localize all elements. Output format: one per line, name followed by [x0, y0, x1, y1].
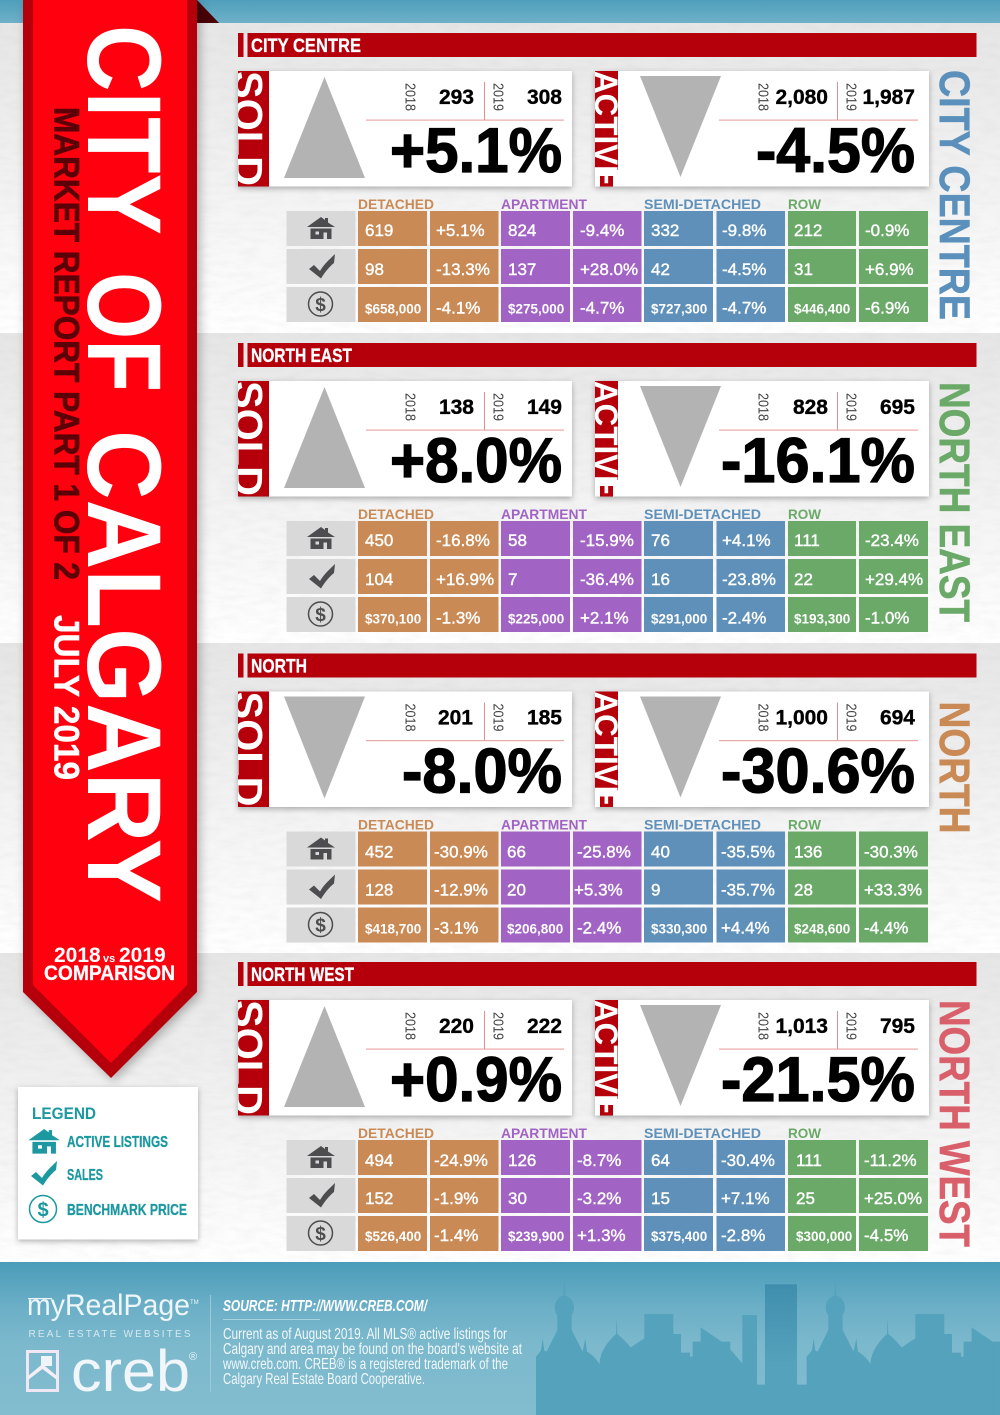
- sold and active cards: 2019: [490, 1012, 506, 1040]
- table: City Centre by property type: -4.5%: [722, 260, 766, 279]
- table: North by property type: 128: [365, 880, 393, 900]
- table: North by property type: -35.5%: [721, 842, 775, 862]
- sold and active cards: 2019: [490, 704, 506, 732]
- heading: City Centre: CITY CENTRE: [251, 36, 361, 57]
- table: North East by property type: +29.4%: [865, 570, 923, 589]
- sold and active cards: 2018: [754, 704, 772, 732]
- side label: North West: NORTH WEST: [930, 1000, 978, 1247]
- sold and active cards: 694: [880, 706, 915, 730]
- side label: North East: NORTH EAST: [930, 382, 978, 622]
- comparison caption: [44, 944, 175, 985]
- table: North by property type: [286, 816, 928, 942]
- sold and active cards: 2019: [842, 393, 860, 421]
- heading: North West: [238, 962, 976, 986]
- table: North East by property type: 7: [508, 570, 517, 589]
- table: City Centre by property type: -9.8%: [722, 221, 766, 240]
- sold and active cards: 2019: [842, 83, 860, 111]
- sold and active cards: 2018: [402, 393, 418, 421]
- table: North West by property type: -4.5%: [864, 1226, 908, 1245]
- table: North by property type: $418,700: [365, 922, 421, 936]
- sold and active cards: -21.5%: [721, 1045, 915, 1115]
- table: City Centre by property type: -0.9%: [865, 221, 909, 240]
- sold and active cards: 2018: [754, 83, 772, 111]
- sold label: SOLD: [225, 692, 271, 806]
- table: North West by property type: 30: [508, 1189, 527, 1208]
- table: North East by property type: -36.4%: [580, 570, 634, 589]
- sold and active cards: -4.5%: [756, 116, 915, 186]
- sold and active cards: 1,000: [775, 706, 828, 730]
- logo: myRealPage: myRealPage: [27, 1289, 190, 1322]
- sold and active cards: [225, 71, 929, 186]
- table: City Centre by property type: -6.9%: [865, 298, 909, 318]
- table: North East by property type: $225,000: [508, 612, 564, 626]
- legend: ACTIVE LISTINGS: [67, 1134, 168, 1151]
- table: North West by property type: 64: [651, 1151, 670, 1170]
- table: North West by property type: $526,400: [365, 1229, 421, 1244]
- table: North East by property type: 450: [365, 531, 393, 550]
- table: North East by property type: $370,100: [365, 612, 421, 626]
- main title: CITY: [65, 25, 182, 235]
- table: North East by property type: -23.4%: [865, 531, 919, 550]
- main title: [65, 25, 182, 903]
- icon: active listings house: [28, 1129, 60, 1154]
- sold and active cards: 2019: [490, 83, 506, 111]
- table: North by property type: -12.9%: [434, 880, 488, 900]
- logo: creb: ®: [189, 1351, 197, 1363]
- icon: benchmark price: [30, 1196, 56, 1222]
- table: North West by property type: -11.2%: [864, 1151, 917, 1170]
- sold and active cards: 149: [527, 396, 562, 419]
- table: City Centre by property type: 332: [651, 221, 679, 240]
- table: City Centre by property type: +28.0%: [580, 260, 638, 279]
- icon: sold down triangle: [284, 696, 365, 798]
- section: North East: [225, 343, 978, 632]
- table: North East by property type: 104: [365, 570, 393, 589]
- legend: SALES: [67, 1167, 103, 1184]
- disclaimer text: [222, 1326, 522, 1388]
- table: North West by property type: [286, 1125, 928, 1251]
- sold and active cards: 2018: [402, 704, 418, 732]
- comparison caption: vs: [103, 953, 115, 965]
- table: North East by property type: 111: [794, 531, 820, 550]
- sold and active cards: 2018: [402, 83, 418, 111]
- logo: myRealPage: REAL ESTATE WEBSITES: [28, 1329, 191, 1340]
- table: North East by property type: +2.1%: [580, 608, 629, 628]
- icon: active down triangle: [640, 1005, 721, 1106]
- sold and active cards: -16.1%: [721, 426, 915, 496]
- heading: North West: NORTH WEST: [251, 965, 354, 986]
- table: North by property type: $330,300: [651, 922, 707, 936]
- table: City Centre by property type: $446,400: [794, 302, 850, 316]
- table: City Centre by property type: 212: [794, 221, 822, 240]
- icon: benchmark price: $: [37, 1200, 49, 1222]
- table: North East by property type: 58: [508, 531, 527, 550]
- icon: sold up triangle: [284, 77, 365, 178]
- sold and active cards: 222: [527, 1015, 562, 1038]
- main title: CALGARY: [65, 430, 182, 903]
- sold and active cards: 2019: [842, 1012, 860, 1040]
- sold label: SOLD: [225, 381, 271, 496]
- table: North West by property type: $300,000: [796, 1229, 852, 1244]
- main title: OF: [65, 272, 182, 392]
- table: City Centre by property type: +5.1%: [436, 221, 485, 240]
- sold and active cards: 828: [793, 396, 828, 419]
- heading: North: [238, 654, 976, 678]
- table: North West by property type: -1.4%: [434, 1226, 478, 1245]
- comparison caption: 2019: [119, 944, 166, 967]
- disclaimer text: Calgary and area may be found on the board's website at: [223, 1341, 522, 1358]
- icon: sales tick: [31, 1161, 57, 1186]
- sold and active cards: -8.0%: [402, 736, 562, 806]
- table: North East by property type: -23.8%: [722, 570, 776, 589]
- table: North West by property type: -3.2%: [577, 1189, 621, 1208]
- table: North by property type: 136: [794, 842, 822, 862]
- sold and active cards: 695: [880, 396, 915, 419]
- ribbon: report title banner: [23, 0, 219, 1078]
- source line: SOURCE: HTTP://WWW.CREB.COM/: [223, 1298, 428, 1315]
- disclaimer text: www.creb.com. CREB® is a registered trademark of the: [222, 1356, 508, 1373]
- disclaimer text: Calgary Real Estate Board Cooperative.: [223, 1371, 425, 1388]
- table: North East by property type: [286, 506, 928, 632]
- table: North by property type: -30.9%: [434, 842, 488, 862]
- table: City Centre by property type: 824: [508, 221, 536, 240]
- table: North East by property type: $291,000: [651, 612, 707, 626]
- sold and active cards: 2,080: [775, 86, 828, 109]
- active label: ACTIVE: [588, 1000, 624, 1115]
- heading: North: NORTH: [251, 656, 307, 678]
- section: City Centre: [225, 33, 978, 322]
- sold and active cards: 138: [439, 396, 474, 419]
- table: North by property type: +5.3%: [574, 880, 623, 900]
- table: North West by property type: 494: [365, 1151, 393, 1170]
- active label: ACTIVE: [588, 692, 624, 806]
- table: North by property type: -35.7%: [721, 880, 775, 900]
- table: North West by property type: $239,900: [508, 1229, 564, 1244]
- table: City Centre by property type: $727,300: [651, 302, 707, 316]
- table: City Centre by property type: +6.9%: [865, 260, 914, 279]
- footer: [0, 1262, 1000, 1415]
- table: North by property type: +33.3%: [864, 880, 922, 900]
- table: City Centre by property type: 619: [365, 221, 393, 240]
- sold and active cards: 2018: [754, 393, 772, 421]
- heading: City Centre: [238, 33, 976, 57]
- sold and active cards: 795: [880, 1015, 915, 1038]
- table: North West by property type: -30.4%: [721, 1151, 775, 1170]
- heading: North East: [238, 343, 976, 367]
- icon: active down triangle: [640, 696, 721, 798]
- table: North East by property type: -15.9%: [580, 531, 634, 550]
- table: North by property type: 9: [651, 880, 660, 900]
- sold and active cards: -30.6%: [721, 736, 915, 806]
- sold label: SOLD: [225, 71, 271, 186]
- sold and active cards: [225, 692, 929, 807]
- table: North West by property type: -8.7%: [577, 1151, 621, 1170]
- table: North by property type: -3.1%: [434, 918, 478, 938]
- legend: LEGEND: [32, 1104, 96, 1123]
- sold and active cards: 220: [439, 1015, 474, 1038]
- sold and active cards: 293: [439, 86, 474, 109]
- table: City Centre by property type: $658,000: [365, 302, 421, 316]
- table: North West by property type: 152: [365, 1189, 393, 1208]
- sold and active cards: 2018: [402, 1012, 418, 1040]
- table: North by property type: 40: [651, 842, 670, 862]
- table: North West by property type: -2.8%: [721, 1226, 765, 1245]
- table: North by property type: $248,600: [794, 922, 850, 936]
- table: North West by property type: -24.9%: [434, 1151, 488, 1170]
- table: North by property type: 28: [794, 880, 813, 900]
- heading: North East: NORTH EAST: [251, 346, 352, 367]
- sold label: SOLD: [225, 1000, 271, 1115]
- table: North West by property type: 111: [796, 1151, 822, 1170]
- table: North East by property type: 76: [651, 531, 670, 550]
- sold and active cards: +0.9%: [390, 1045, 562, 1115]
- table: North by property type: -30.3%: [864, 842, 918, 862]
- table: North East by property type: -1.3%: [436, 608, 480, 628]
- table: North by property type: -4.4%: [864, 918, 908, 938]
- sold and active cards: 1,987: [862, 86, 915, 109]
- table: North East by property type: +16.9%: [436, 570, 494, 589]
- table: North by property type: -2.4%: [577, 918, 621, 938]
- table: City Centre by property type: 98: [365, 260, 384, 279]
- section: North West: [225, 962, 978, 1251]
- active label: ACTIVE: [588, 381, 624, 496]
- city skyline: [536, 1277, 1000, 1415]
- comparison caption: COMPARISON: [44, 961, 175, 985]
- sold and active cards: 308: [527, 86, 562, 109]
- icon: sold up triangle: [284, 1006, 365, 1107]
- sold and active cards: [225, 1000, 929, 1116]
- sold and active cards: [225, 381, 929, 496]
- table: North West by property type: +25.0%: [864, 1189, 922, 1208]
- disclaimer text: Current as of August 2019. All MLS® active listings for: [223, 1326, 507, 1343]
- table: North East by property type: +4.1%: [722, 531, 771, 550]
- table: City Centre by property type: -13.3%: [436, 260, 490, 279]
- table: City Centre by property type: 31: [794, 260, 813, 279]
- table: North by property type: 66: [507, 842, 526, 862]
- table: North West by property type: 126: [508, 1151, 536, 1170]
- table: North East by property type: 22: [794, 570, 813, 589]
- table: North by property type: -25.8%: [577, 842, 631, 862]
- logo: creb: [28, 1339, 197, 1404]
- sold and active cards: 2019: [842, 704, 860, 732]
- table: North West by property type: 15: [651, 1189, 670, 1208]
- table: North by property type: $206,800: [507, 922, 563, 936]
- icon: active down triangle: [640, 76, 721, 177]
- sold and active cards: 201: [438, 706, 473, 730]
- side label: City Centre: CITY CENTRE: [930, 70, 978, 320]
- table: North West by property type: +1.3%: [577, 1226, 626, 1245]
- sold and active cards: 2019: [490, 393, 506, 421]
- table: North East by property type: -16.8%: [436, 531, 490, 550]
- legend: [18, 1087, 198, 1240]
- table: North by property type: 452: [365, 842, 393, 862]
- table: City Centre by property type: -9.4%: [580, 221, 624, 240]
- logo: myRealPage: TM: [190, 1300, 199, 1306]
- icon: sold up triangle: [284, 387, 365, 488]
- section: North: [225, 654, 978, 942]
- date: JULY 2019: [46, 615, 86, 780]
- icon: active down triangle: [640, 386, 721, 487]
- table: City Centre by property type: 137: [508, 260, 536, 279]
- comparison caption: 2018: [54, 944, 101, 967]
- legend: BENCHMARK PRICE: [67, 1202, 187, 1219]
- side label: North: NORTH: [930, 702, 978, 834]
- top blue band: [0, 0, 1000, 23]
- logo: myRealPage: [27, 1289, 199, 1340]
- table: City Centre by property type: -4.7%: [580, 298, 624, 318]
- sold and active cards: +8.0%: [390, 426, 562, 496]
- table: North West by property type: $375,400: [651, 1229, 707, 1244]
- table: City Centre by property type: 42: [651, 260, 670, 279]
- table: North East by property type: $193,300: [794, 612, 850, 626]
- table: North by property type: 20: [507, 880, 526, 900]
- table: North East by property type: -1.0%: [865, 608, 909, 628]
- table: North by property type: +4.4%: [721, 918, 770, 938]
- table: City Centre by property type: -4.1%: [436, 298, 480, 318]
- table: City Centre by property type: -4.7%: [722, 298, 766, 318]
- sold and active cards: 2018: [754, 1012, 772, 1040]
- active label: ACTIVE: [588, 71, 624, 186]
- table: North East by property type: -2.4%: [722, 608, 766, 628]
- table: North West by property type: +7.1%: [721, 1189, 770, 1208]
- sold and active cards: +5.1%: [390, 116, 562, 186]
- logo: creb: creb: [71, 1339, 190, 1404]
- sold and active cards: 185: [527, 706, 562, 730]
- table: North West by property type: 25: [796, 1189, 815, 1208]
- table: City Centre by property type: $275,000: [508, 302, 564, 316]
- table: North West by property type: -1.9%: [434, 1189, 478, 1208]
- subtitle: MARKET REPORT PART 1 OF 2: [46, 107, 86, 580]
- table: City Centre by property type: [286, 196, 928, 322]
- table: North East by property type: 16: [651, 570, 670, 589]
- sold and active cards: 1,013: [775, 1015, 828, 1038]
